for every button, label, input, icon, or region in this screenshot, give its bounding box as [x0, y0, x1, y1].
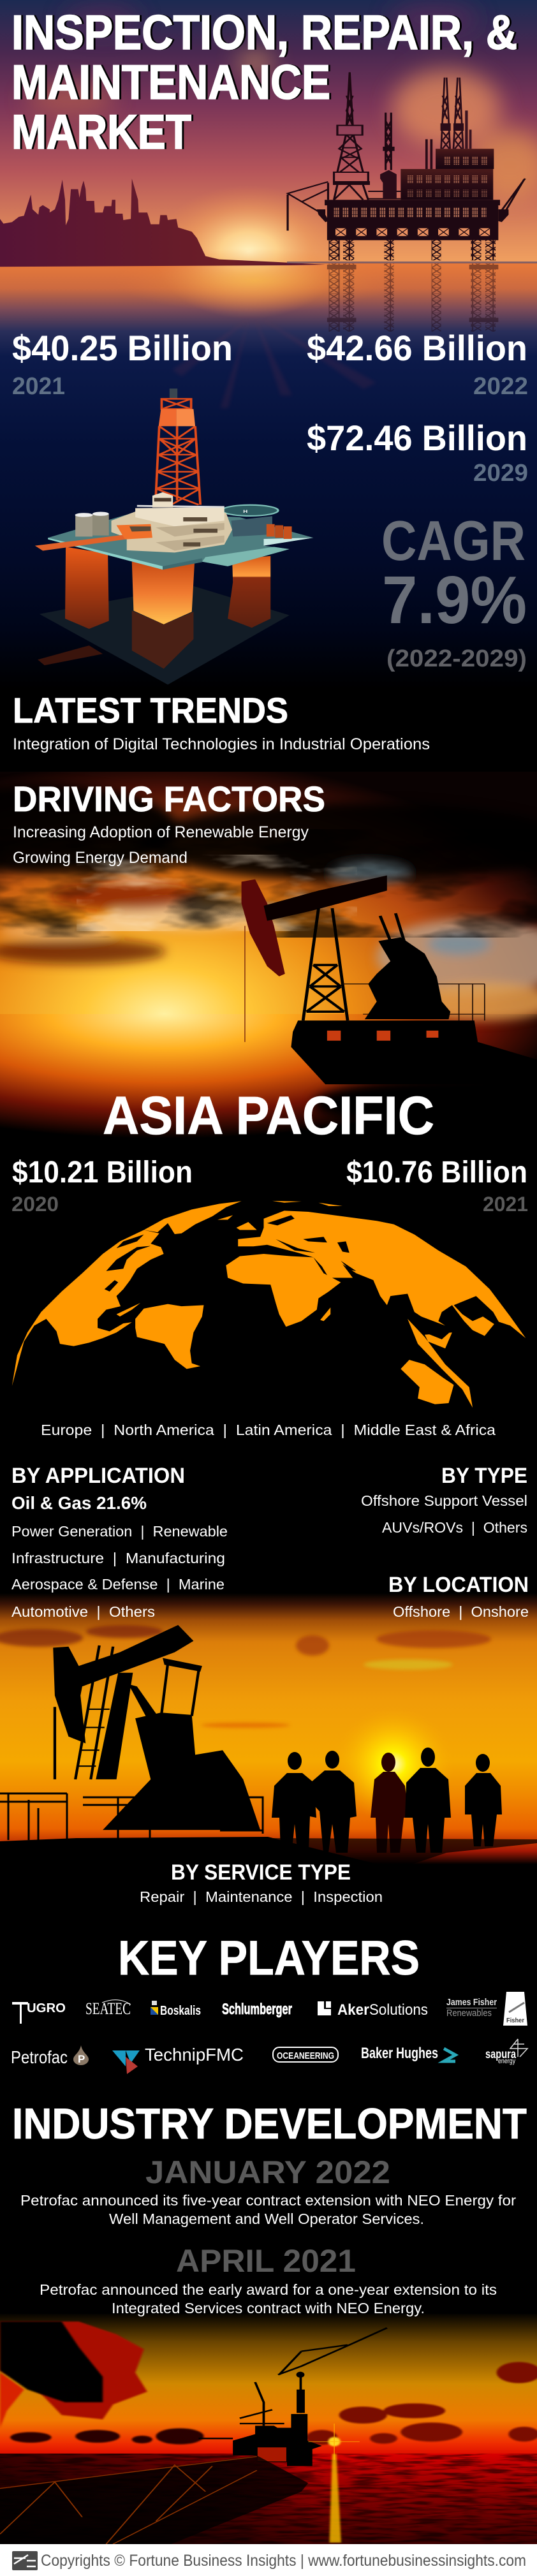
text: service segments: Repair | Maintenance | Inspection — [140, 1888, 383, 1905]
logo: Petrofac: Petrofac — [11, 2047, 68, 2067]
text: leading segment: Oil & Gas 21.6% — [11, 1493, 147, 1513]
text: April 2021 description — [40, 2281, 497, 2316]
light rays under the water — [172, 319, 376, 408]
Asia Pacific value 2020: $10.21 Billion — [12, 1156, 193, 1189]
logo: TechnipFMC: TechnipFMC — [145, 2045, 244, 2064]
Asia Pacific value 2020 — [11, 1156, 193, 1216]
icon: sun and water reflection — [308, 2424, 360, 2543]
icon: offshore oil rig silhouette — [288, 72, 525, 260]
text: application segments: Aerospace & Defense | Marine — [11, 1576, 224, 1593]
heading: latest trends: LATEST TRENDS — [13, 690, 288, 730]
logo: Petrofac: P — [78, 2053, 85, 2065]
clouds — [0, 2322, 537, 2445]
logo: James Fisher Renewables: James Fisher — [446, 1997, 497, 2008]
panel: driving factors — [13, 779, 325, 867]
heading: by application: BY APPLICATION — [11, 1464, 185, 1488]
heading: April 2021: APRIL 2021 — [176, 2243, 356, 2279]
text: January 2022 description: Well Management and Well Operator Services. — [109, 2211, 424, 2227]
logo: Boskalis — [151, 2001, 201, 2018]
title: MARKET — [11, 105, 191, 159]
panel: by service type — [140, 1860, 383, 1905]
market value 2029: 2029 — [473, 460, 528, 487]
text: type segments: AUVs/ROVs | Others — [382, 1519, 527, 1536]
CAGR callout: 7.9% — [382, 563, 527, 638]
logo: Aker Solutions: AkerSolutions — [337, 2001, 428, 2019]
text: other regions: Europe | North America | Latin America | Middle East & Africa — [41, 1422, 496, 1438]
text: location segments: Offshore | Onshore — [393, 1603, 529, 1620]
icon: oil pump jack silhouette — [242, 876, 537, 1084]
icon: isometric oil platform: H — [243, 509, 247, 513]
market value 2022: $42.66 Billion — [307, 328, 527, 368]
CAGR callout — [381, 509, 527, 672]
logo: Fugro — [12, 2001, 66, 2024]
icon: orange world map globe — [12, 1201, 526, 1408]
logo: Baker Hughes: Baker Hughes — [361, 2045, 438, 2062]
market value 2021: $40.25 Billion — [12, 328, 233, 368]
logo: Fugro: UGRO — [27, 2001, 66, 2015]
logo: Oceaneering: OCEANEERING — [277, 2050, 334, 2061]
icon: city skyline silhouette — [0, 179, 325, 267]
market value 2022: 2022 — [473, 373, 528, 400]
title — [11, 6, 517, 159]
market value 2029: $72.46 Billion — [307, 418, 527, 458]
CAGR callout: (2022-2029) — [386, 645, 527, 672]
icon: offshore rig silhouette — [198, 2328, 387, 2466]
logo: James Fisher Renewables: Renewables — [446, 2008, 492, 2019]
heading: by type: BY TYPE — [441, 1464, 527, 1488]
text: application segments: Power Generation | Renewable — [11, 1523, 228, 1540]
water reflection of rig — [327, 263, 498, 332]
logo: Schlumberger: Schlumberger — [222, 2001, 292, 2018]
logo: Oceaneering — [273, 2047, 338, 2062]
logo: Sapura Energy — [485, 2039, 527, 2065]
panel: oil field workers at sunset photo — [0, 1593, 537, 1866]
panel: by type — [361, 1464, 527, 1536]
panel: latest trends — [13, 690, 430, 753]
heading: driving factors: DRIVING FACTORS — [13, 779, 325, 819]
logo: Boskalis: Boskalis — [160, 2004, 201, 2018]
logo: Sapura Energy: energy — [498, 2057, 515, 2065]
logo: Fortune Business Insights — [12, 2551, 38, 2570]
heading: January 2022: JANUARY 2022 — [145, 2154, 390, 2190]
panel: by location — [388, 1573, 529, 1620]
Asia Pacific value 2020: 2020 — [11, 1193, 59, 1216]
heading: key players: KEY PLAYERS — [118, 1931, 420, 1985]
icon: walkway bridge silhouette — [0, 2455, 308, 2544]
text: application segments: Automotive | Others — [11, 1603, 155, 1620]
panel: oil pump at sunset photo — [0, 772, 537, 1138]
panel: sunset hero illustration — [0, 0, 537, 689]
market value 2021: 2021 — [12, 373, 65, 400]
text: type segments: Offshore Support Vessel — [361, 1492, 527, 1509]
text: April 2021 description: Petrofac announced the early award for a one-year extension to its — [40, 2281, 497, 2298]
icon: fence and pipework silhouette — [0, 1793, 263, 1840]
market value 2022 — [307, 328, 528, 400]
title: MAINTENANCE — [11, 55, 330, 110]
panel: offshore rig sunset photo — [0, 2314, 537, 2544]
icon: pump jack silhouette — [53, 1625, 260, 1830]
text: driving factor one: Increasing Adoption of Renewable Energy — [13, 823, 309, 841]
logo: James Fisher Renewables: Fisher — [506, 2017, 524, 2024]
heading: by service type: BY SERVICE TYPE — [171, 1860, 351, 1885]
panel: footer — [0, 2544, 537, 2576]
icon: workers silhouettes — [272, 1748, 502, 1853]
Asia Pacific value 2021: 2021 — [483, 1193, 528, 1216]
text: April 2021 description: Integrated Services contract with NEO Energy. — [112, 2300, 425, 2316]
logo: SeaTec: SEATEC — [85, 1999, 131, 2018]
logo: TechnipFMC — [112, 2045, 244, 2074]
heading: by location: BY LOCATION — [388, 1573, 529, 1597]
text: driving factor two: Growing Energy Demand — [13, 849, 188, 867]
panel: development January 2022 — [20, 2154, 516, 2227]
panel: company logos — [11, 1992, 527, 2074]
text: January 2022 description — [20, 2192, 516, 2227]
text: January 2022 description: Petrofac announced its five-year contract extension with NEO Energy for — [20, 2192, 516, 2209]
text: application segments — [11, 1523, 228, 1620]
panel: by application — [11, 1464, 228, 1620]
heading: Asia Pacific: ASIA PACIFIC — [103, 1086, 434, 1145]
logo: Sapura Energy: sapura — [485, 2048, 516, 2061]
Asia Pacific value 2021: $10.76 Billion — [346, 1156, 527, 1189]
icon: isometric oil platform — [35, 388, 313, 685]
market value 2029 — [307, 418, 528, 487]
text: type segments — [361, 1492, 527, 1536]
text: application segments: Infrastructure | Manufacturing — [11, 1550, 225, 1566]
text: latest trends item: Integration of Digital Technologies in Industrial Operations — [13, 735, 430, 753]
Asia Pacific value 2021 — [346, 1156, 528, 1216]
logo: James Fisher Renewables — [446, 1992, 527, 2026]
market value 2021 — [12, 328, 233, 400]
panel: development April 2021 — [40, 2243, 497, 2316]
